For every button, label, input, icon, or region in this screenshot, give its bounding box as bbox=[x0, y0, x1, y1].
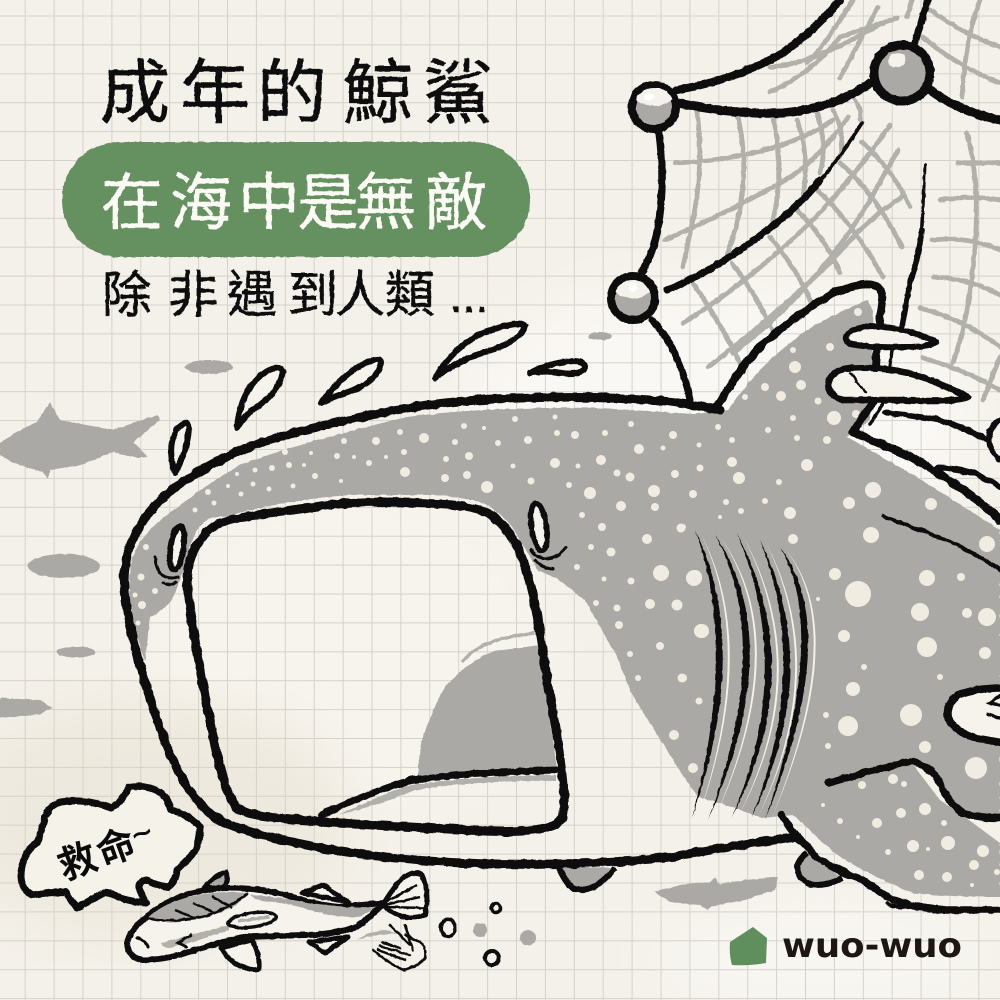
icon: green house bbox=[730, 927, 767, 965]
speech bubble bbox=[21, 786, 200, 908]
fish body bbox=[127, 888, 384, 960]
body fill bbox=[129, 300, 1000, 897]
whale outlines bbox=[124, 284, 1000, 910]
fish back pattern bbox=[148, 892, 248, 923]
net ropes bbox=[642, 0, 1000, 400]
small fish bbox=[127, 872, 427, 970]
title: 成年的鯨鯊 bbox=[100, 54, 493, 132]
net float: top right bbox=[874, 45, 930, 101]
background silhouettes: fish and blobs bbox=[0, 332, 778, 910]
gill slits bbox=[698, 534, 816, 820]
side oval at right edge bbox=[947, 688, 1000, 743]
fish fins bbox=[204, 872, 427, 970]
lower fin pale band bbox=[913, 762, 1000, 843]
pill text: 在海中是無敵 bbox=[101, 169, 487, 238]
net mesh lines bbox=[665, 0, 1000, 400]
eyes bbox=[155, 502, 566, 584]
mouth interior shape bbox=[338, 633, 557, 815]
whale shark bbox=[124, 284, 1000, 910]
fish ghost fin bbox=[373, 925, 425, 970]
green pill banner bbox=[62, 142, 530, 257]
bubble text: 救命 bbox=[53, 822, 141, 889]
bubble text: ~ bbox=[126, 813, 158, 855]
rope-like oval tags on dorsal fin bbox=[828, 326, 968, 401]
bubbles bbox=[441, 904, 536, 965]
spots bbox=[132, 308, 1000, 887]
subtitle: 除非遇到人類... bbox=[102, 267, 489, 323]
water splash drops bbox=[171, 324, 585, 473]
pelvic fins bbox=[558, 853, 910, 907]
fish side stripe, eye and pectoral fin bbox=[161, 925, 229, 948]
pill background bbox=[62, 142, 530, 257]
net float: left bottom bbox=[611, 276, 655, 320]
brand name: wuo-wuo bbox=[782, 926, 962, 966]
fishing net bbox=[611, 0, 1000, 400]
logo bbox=[730, 926, 962, 966]
net float: left top bbox=[632, 85, 676, 129]
